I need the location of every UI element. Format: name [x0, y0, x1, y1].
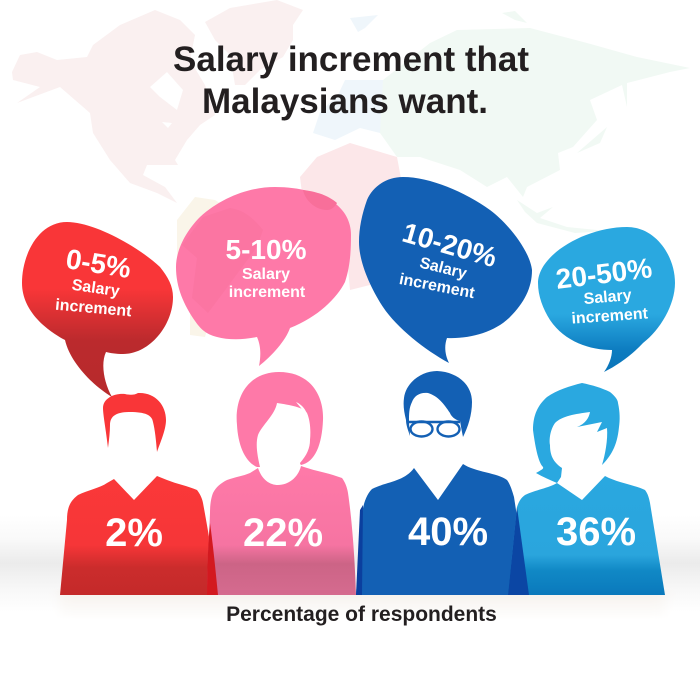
floor shadow [0, 515, 700, 620]
speech bubble: 0-5%: Salary [71, 277, 121, 300]
speech bubble: 0-5% [22, 222, 173, 397]
speech bubble: 5-10% [176, 187, 351, 366]
speech bubble: 5-10%: increment [229, 284, 306, 301]
person: red man [60, 393, 218, 595]
person: blue man with glasses [356, 371, 529, 595]
axis caption: Percentage of respondents [226, 603, 497, 626]
value: 2%: 2% [105, 511, 163, 555]
person: pink woman [207, 372, 356, 595]
speech bubble: 5-10%: 5-10% [226, 234, 307, 265]
world map background [12, 0, 690, 337]
title [173, 40, 529, 121]
value: 22%: 22% [243, 511, 323, 555]
speech bubble: 20-50% [538, 227, 675, 372]
speech bubble: 10-20% [359, 177, 532, 363]
person: light blue woman [508, 383, 665, 595]
speech bubble: 10-20%: 10-20% [399, 217, 500, 273]
panel: 20-50% group [508, 227, 675, 595]
speech bubble: 5-10%: Salary [242, 266, 290, 283]
title: Malaysians want. [202, 82, 488, 121]
speech bubble: 10-20%: Salary [418, 255, 469, 283]
title: Salary increment that [173, 40, 529, 79]
value: 36%: 36% [556, 510, 636, 554]
panel: 5-10% group [176, 187, 356, 595]
speech bubble: 0-5%: 0-5% [64, 243, 133, 284]
speech bubble: 0-5%: increment [55, 297, 133, 320]
value: 40%: 40% [408, 510, 488, 554]
speech bubble: 20-50%: Salary [583, 287, 632, 308]
speech bubble: 20-50%: 20-50% [554, 252, 654, 295]
speech bubble: 10-20%: increment [398, 271, 477, 302]
panel: 0-5% group [22, 222, 218, 595]
panel: 10-20% group [356, 177, 532, 595]
speech bubble: 20-50%: increment [571, 305, 649, 328]
